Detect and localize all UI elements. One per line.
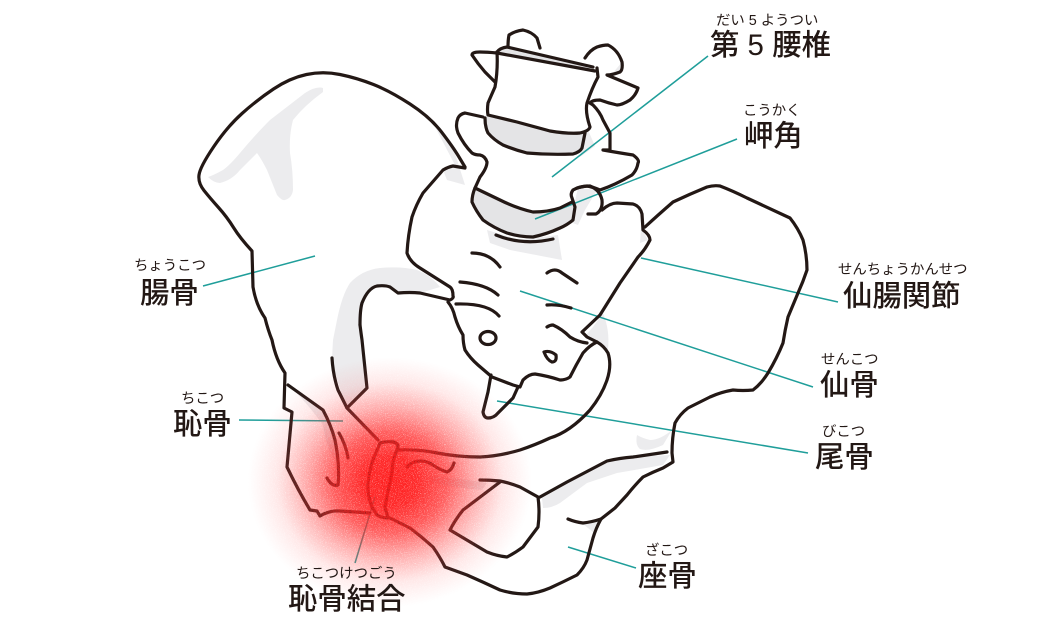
label: 岬角 <box>743 102 803 153</box>
left ilium outline <box>199 73 465 516</box>
label: 恥骨結合 <box>288 565 406 616</box>
label: 岬角: こうかく <box>743 102 801 119</box>
label: 腸骨: ちょうこつ <box>134 257 206 274</box>
lower vertebra <box>456 103 638 237</box>
ischial ramus <box>540 452 667 497</box>
pubic symphysis <box>368 442 398 518</box>
label: 仙腸関節 <box>838 261 968 313</box>
lumbar discs <box>472 47 595 237</box>
right ilium outline <box>388 186 807 594</box>
label: 第5腰椎: 第 5 腰椎 <box>710 29 831 62</box>
disc: lower <box>472 188 575 237</box>
left inner pubis <box>288 385 339 485</box>
label: 腸骨 <box>134 257 206 310</box>
label: 仙腸関節: せんちょうかんせつ <box>838 261 968 278</box>
label: 座骨 <box>638 541 697 593</box>
obturator arch <box>360 166 465 325</box>
teal leader lines under artwork <box>203 56 838 568</box>
label: 座骨: 座骨 <box>638 560 697 593</box>
red pain glow over pubic symphysis <box>248 357 532 607</box>
label: 仙骨: 仙骨 <box>820 369 879 402</box>
pelvis line art <box>199 30 807 594</box>
label: 恥骨結合: 恥骨結合 <box>288 583 406 616</box>
label: 腸骨: 腸骨 <box>140 277 199 310</box>
label: 恥骨: 恥骨 <box>173 408 232 441</box>
label: 第5腰椎: だい 5 ようつい <box>716 13 818 29</box>
obturator foramen <box>450 480 539 557</box>
sacral ridges <box>496 235 553 242</box>
label: 尾骨: びこつ <box>822 423 865 440</box>
coccyx <box>483 375 518 418</box>
label: 尾骨: 尾骨 <box>815 441 874 474</box>
label: 恥骨結合: ちこつけつごう <box>296 565 397 582</box>
label: 恥骨 <box>173 390 232 441</box>
small ischium line <box>568 519 601 523</box>
pubis wiggle <box>407 461 454 472</box>
label: 尾骨 <box>815 423 874 474</box>
disc: upper <box>485 116 586 154</box>
label: 座骨: ざこつ <box>645 541 688 559</box>
label: 仙骨: せんこつ <box>821 352 879 368</box>
upper vertebra <box>488 52 598 133</box>
sacral foramina <box>480 332 496 344</box>
sacrum lower outline <box>448 302 597 387</box>
label: 第5腰椎 <box>710 13 831 62</box>
label: 仙骨 <box>820 352 879 402</box>
label: 岬角: 岬角 <box>744 120 803 153</box>
label: 仙腸関節: 仙腸関節 <box>843 280 961 313</box>
grey bone shading <box>208 62 672 532</box>
pubic upper ramus <box>398 203 650 457</box>
label: 恥骨: ちこつ <box>181 390 224 407</box>
